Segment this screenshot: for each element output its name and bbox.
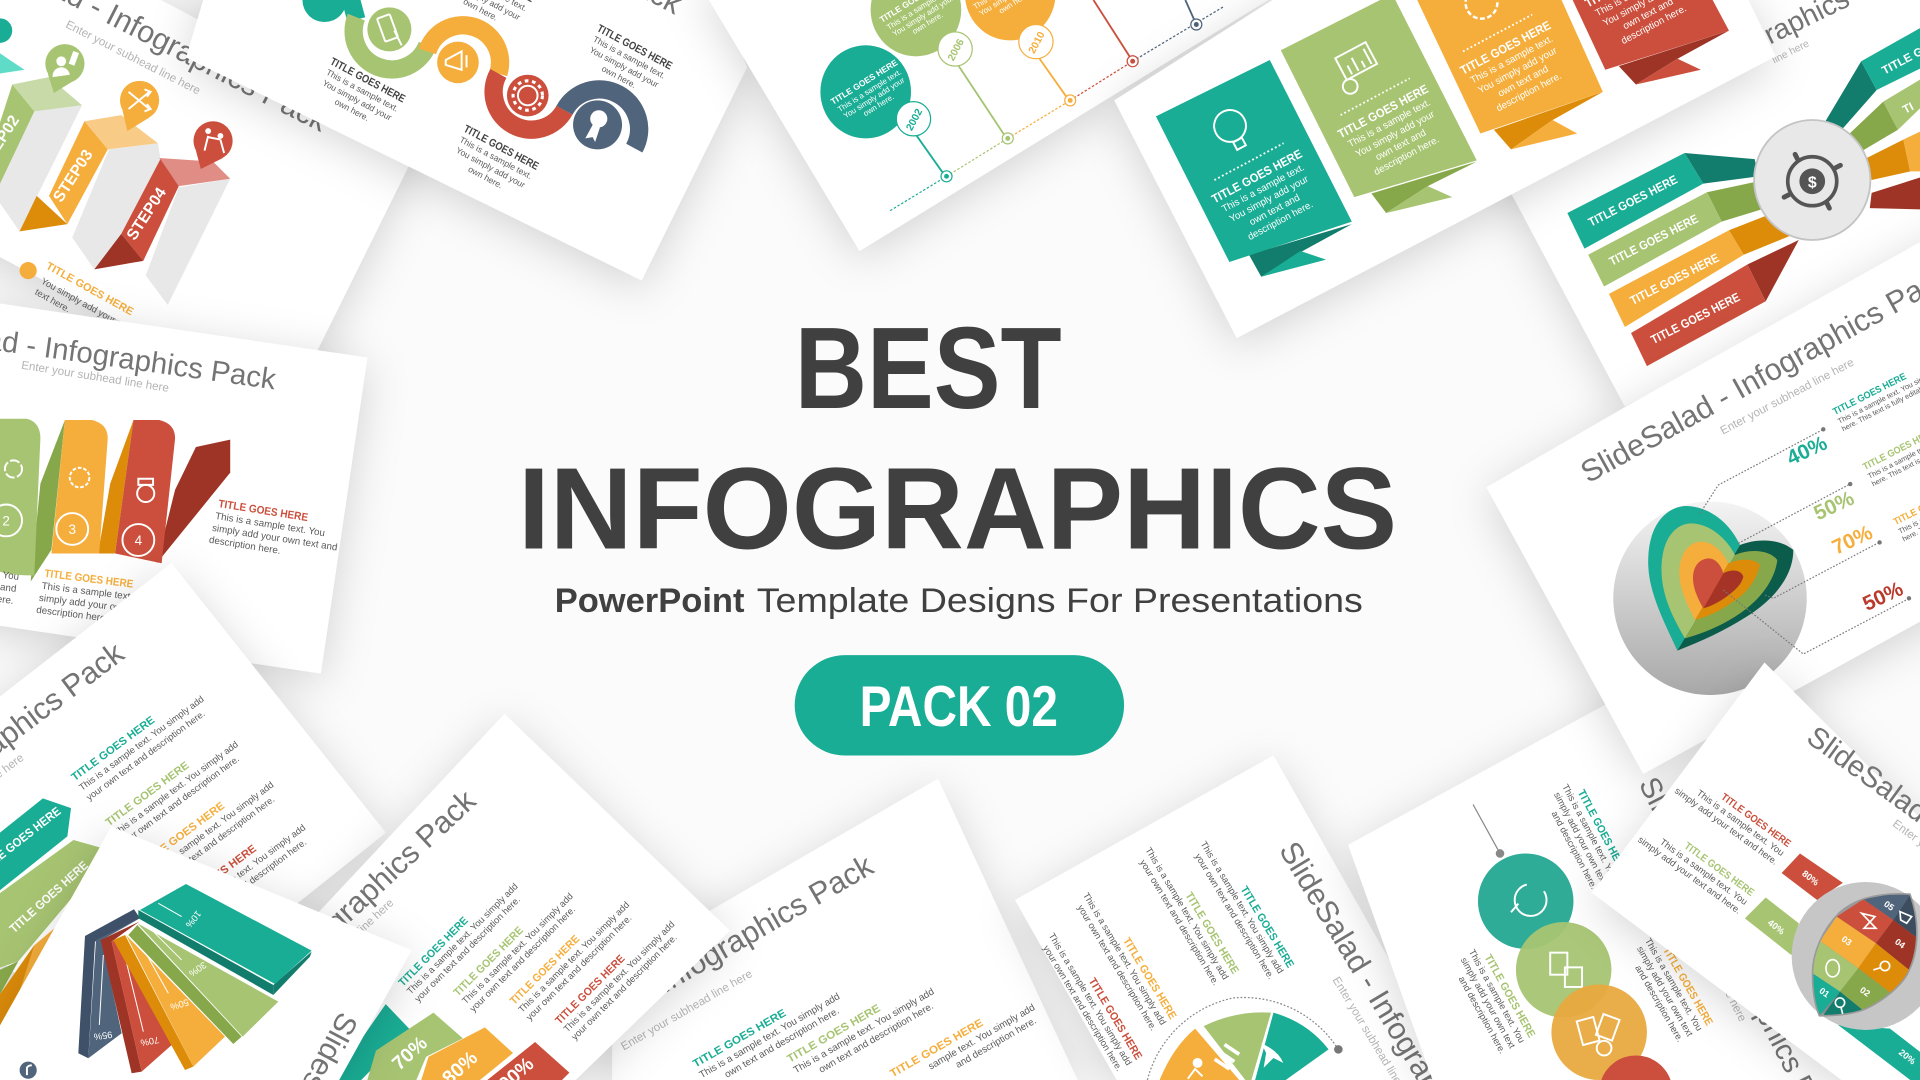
- text block: teal: TITLE GOES HERE: [69, 714, 157, 784]
- text block: teal: your own text and description here.: [1193, 852, 1276, 981]
- text block: teal: your own text and description here.: [85, 708, 207, 803]
- text block: red: your own text and description here.: [570, 933, 679, 1042]
- text block: red: TITLE GOES HERE: [1086, 976, 1144, 1062]
- slide subhead: line here: [1771, 38, 1811, 66]
- logo dot: [20, 1062, 37, 1079]
- milestone 2006: [871, 0, 1013, 144]
- percent arrow: orange 80%: [421, 1027, 513, 1080]
- text block: orange: [1624, 930, 1715, 1044]
- tab caption: green: [0, 543, 24, 607]
- percent labels: 50%: [1859, 577, 1907, 616]
- text block: green: This is a sample text. You simply add: [1143, 846, 1230, 981]
- milestone 2002: 2002: [905, 107, 925, 133]
- text block: red: simply add your text and here.: [1673, 785, 1780, 867]
- serpentine captions: own here.: [600, 64, 638, 90]
- bar: 40%: [1745, 898, 1799, 955]
- bar: 20%: 20%: [1897, 1047, 1917, 1066]
- tab caption: orange: TITLE GOES HERE: [44, 568, 134, 591]
- percent labels: 40%: [1783, 432, 1831, 470]
- text block: teal: TITLE GOES HERE: [396, 915, 471, 989]
- leader end dots: [1821, 427, 1911, 600]
- ribbon: green: TITLE GOES HERE: [1335, 82, 1431, 141]
- text block: teal: This is a sample text. You: [1560, 783, 1619, 880]
- badge: PACK 02: [795, 655, 1124, 756]
- milestone 2002: TITLE GOES HERE: [829, 57, 900, 107]
- funnel rays right: [1823, 28, 1920, 209]
- tab: green: [0, 419, 40, 576]
- serpentine captions: This is a sample text.: [325, 67, 400, 114]
- ribbon: orange: own text and: [1496, 64, 1550, 100]
- milestone 2010: 2010: [1027, 30, 1048, 56]
- percent arrow: green 70%: 70%: [388, 1032, 432, 1075]
- circle: red: [1601, 1055, 1671, 1080]
- text block: teal: This is a sample text. You simply add: [77, 694, 206, 793]
- bar: 80%: 80%: [1800, 868, 1821, 888]
- sphere labels: [1817, 899, 1907, 999]
- text block: teal: TITLE GOES HERE: [1238, 884, 1296, 970]
- serpentine captions: You simply add your: [454, 145, 527, 190]
- sphere labels: 03: [1840, 934, 1854, 948]
- panel: sphere pie slide: [1592, 662, 1920, 1080]
- funnel hub icon: [1754, 120, 1870, 240]
- heading: INFOGRAPHICS: INFOGRAPHICS: [518, 444, 1397, 574]
- heading: BEST: BEST: [795, 303, 1062, 433]
- funnel hub icon: $: [1808, 174, 1817, 191]
- funnel rays right: TI: [1901, 100, 1916, 117]
- text block: red: This is a sample text. You simply add: [562, 919, 677, 1034]
- text block: green: your own text and description here.: [1138, 858, 1221, 987]
- step 4 column: [94, 121, 233, 305]
- text block: teal: and description here.: [1550, 809, 1599, 891]
- sphere icons: [1826, 912, 1912, 1014]
- text block: orange: This is a sample text. You simply add: [1081, 891, 1168, 1027]
- tab caption: red: description here.: [208, 535, 281, 557]
- text block: teal: [1541, 777, 1629, 891]
- ribbon: teal: TITLE GOES HERE: [1209, 147, 1305, 206]
- text block: orange: your own text and description here.: [154, 794, 277, 888]
- sphere labels: 04: [1893, 937, 1907, 950]
- fan segment: red 70%: 70%: [140, 1035, 160, 1048]
- text block: red: your own text and description here.: [186, 837, 308, 931]
- milestone 2006: own here.: [911, 10, 945, 36]
- funnel bar: green: [1588, 181, 1769, 287]
- ribbon: orange: TITLE GOES HERE: [1458, 18, 1553, 78]
- serpentine captions: You simply add your: [321, 78, 394, 123]
- text block: green: TITLE GOES HERE: [104, 760, 191, 829]
- percent arrow: green 70%: [367, 1013, 463, 1080]
- text block: green: TITLE GOES HERE: [452, 925, 526, 999]
- milestone 2002: [820, 45, 952, 182]
- tab caption: red: This is a sample text. You: [214, 511, 326, 539]
- tab: orange: 3: [69, 522, 76, 537]
- milestone 2006: 2006: [946, 37, 967, 63]
- text block: green: TITLE GOES HERE: [1183, 890, 1241, 976]
- percent labels: 50%: [1810, 487, 1858, 525]
- slide subhead: Enter your subhead line here: [20, 359, 170, 395]
- funnel bar: orange: [1609, 213, 1795, 327]
- tab: red: [115, 420, 175, 563]
- text block: green: [1448, 942, 1537, 1056]
- 3D fan chart: [78, 884, 312, 1073]
- tab caption: orange: [36, 567, 154, 630]
- text block: red: TITLE GOES HERE: [1719, 792, 1793, 850]
- subtitle: PowerPoint: [555, 582, 744, 620]
- serpentine captions: own here.: [333, 97, 371, 123]
- bar: 80%: [1782, 853, 1843, 900]
- tab: red: 4: [135, 533, 143, 548]
- sphere labels: 02: [1858, 985, 1872, 999]
- text block: orange: This is a sample text. You: [1643, 936, 1704, 1033]
- ribbon: orange: You simply add your: [1476, 45, 1560, 96]
- text block: red: your own text and description here.: [1041, 944, 1124, 1073]
- funnel bar: red: TITLE GOES HERE: [1649, 290, 1742, 347]
- ribbon: teal: description here.: [1246, 199, 1315, 243]
- text block: orange: TITLE GOES HERE: [508, 933, 582, 1007]
- panel: overlapping circles slide: [1348, 662, 1842, 1080]
- tab: orange: [51, 420, 108, 553]
- funnel bar: orange: TITLE GOES HERE: [1628, 251, 1721, 308]
- arrow: orange: [0, 912, 73, 1035]
- sphere segments: [1813, 894, 1916, 1015]
- serpentine captions: This is a sample text.: [591, 34, 667, 81]
- fan segment: teal 10%: [138, 884, 312, 995]
- ribbon: teal: You simply add your: [1228, 174, 1311, 225]
- milestone 2010: [965, 0, 1076, 106]
- dotted leaders: [1700, 429, 1909, 654]
- tab caption: orange: description here.: [36, 605, 109, 625]
- funnel bar: red: [1631, 240, 1799, 366]
- text block: orange: simply add your own text: [1635, 945, 1695, 1039]
- slide subhead: Enter your subhead line here: [1670, 885, 1749, 1024]
- circle: green: [1516, 922, 1611, 1018]
- ribbon: red: description here.: [1620, 3, 1689, 47]
- arrow: green: TITLE GOES HERE: [7, 858, 91, 936]
- text block: teal: TITLE GOES HERE: [1575, 788, 1629, 876]
- fan segment: orange 50%: [113, 935, 225, 1070]
- tab caption: red: [208, 497, 342, 566]
- text block: orange: [1892, 470, 1920, 543]
- panel: arrows slide: [0, 563, 386, 1053]
- ribbon: orange: This is a sample text.: [1469, 34, 1555, 86]
- fan segment: orange 50%: 50%: [169, 997, 190, 1012]
- milestone 2002: You simply add your: [842, 75, 907, 120]
- percent arrow: teal: [333, 1004, 410, 1080]
- slide subhead: Enter your subhead line here: [1718, 356, 1856, 437]
- panel: pie slide: [1015, 756, 1457, 1080]
- text block: green: and description here.: [1457, 975, 1507, 1055]
- text block: orange: your own text and description here.: [524, 913, 634, 1022]
- leader line: [1473, 804, 1504, 858]
- timeline axis: [890, 6, 1224, 211]
- text block: green: This is a sample text. You: [1467, 948, 1527, 1045]
- panel: steps slide: [0, 0, 422, 410]
- slide title: SlideSalad - Infographics Pack: [501, 848, 880, 1080]
- ribbon: red: [1570, 0, 1729, 84]
- text block: green: This is a sample text. You simply add: [112, 739, 240, 838]
- text block: teal: your own text and description here.: [413, 895, 522, 1004]
- subtitle remainder: Template Designs For Presentations: [757, 582, 1363, 620]
- funnel bar: green: TITLE GOES HERE: [1607, 212, 1701, 269]
- text block: green: TITLE GOES HERE: [785, 1002, 882, 1065]
- text block: orange: TITLE GOES HERE: [1120, 936, 1178, 1022]
- panel: folded tabs slide: [0, 300, 367, 673]
- text block: green: This is a sample text. You simply add: [792, 986, 936, 1076]
- serpentine captions: TITLE GOES HERE: [595, 23, 674, 72]
- text block: red: This is a sample text. You simply add: [179, 823, 307, 921]
- tab caption: orange: This is a sample text. You: [41, 581, 152, 605]
- funnel bar: teal: [1567, 153, 1758, 249]
- sphere labels: 05: [1882, 899, 1896, 913]
- panel: heart slide: [1487, 220, 1920, 774]
- step caption: TITLE GOES HERE: [44, 260, 135, 318]
- serpentine captions: You simply add your: [588, 45, 660, 90]
- serpentine captions: This is a sample text.: [458, 134, 534, 181]
- tab: green: 2: [2, 513, 10, 528]
- fan segment: green 30%: [128, 923, 278, 1044]
- text block: green: This is a sample text. You: [1658, 837, 1749, 907]
- gray sphere: [1613, 502, 1807, 695]
- tab wedges: [31, 420, 230, 582]
- text block: green: This is a sample text. You simply add: [460, 891, 575, 1006]
- serpentine path: [348, 0, 639, 148]
- circle: orange: [1551, 984, 1647, 1080]
- fan segment: slate 95%: [78, 909, 140, 1058]
- percent labels: 70%: [1829, 521, 1876, 559]
- text block: teal: own text and description here.: [723, 1006, 841, 1080]
- step 4 column: STEP04: [124, 185, 170, 243]
- step 3 column: [20, 81, 160, 269]
- ribbon: orange: [1414, 0, 1603, 149]
- text block: red: This is a sample text. You simply add: [1047, 931, 1134, 1067]
- ribbon: green: own text and: [1374, 127, 1428, 163]
- text block: green: your own text and description here.: [119, 754, 241, 848]
- serpentine captions: TITLE GOES HERE: [461, 123, 541, 173]
- pie chart: [1147, 997, 1343, 1080]
- text block: orange: and description here.: [954, 1016, 1039, 1071]
- milestone slate: [1185, 0, 1202, 30]
- text block: green: TITLE GOES HERE: [1482, 953, 1537, 1040]
- subtitle: [555, 582, 1363, 620]
- ribbon: green: You simply add your: [1354, 109, 1437, 160]
- milestone red: [1093, 0, 1138, 67]
- text block: green: your own text and description here.: [468, 904, 577, 1014]
- text block: orange: [888, 991, 1043, 1080]
- text block: orange: TITLE GOES HERE: [139, 800, 227, 869]
- text block: orange: your own text and description here.: [1075, 903, 1159, 1032]
- ribbon: teal: [1156, 60, 1352, 277]
- ribbon: orange: description here.: [1495, 71, 1564, 114]
- step caption: text here.: [33, 287, 72, 314]
- serpentine captions: own here.: [467, 164, 504, 190]
- step 3 column: STEP03: [50, 147, 97, 205]
- bar: 40%: 40%: [1766, 917, 1786, 937]
- text block: red: TITLE GOES HERE: [171, 843, 259, 912]
- circle: teal: [1478, 853, 1573, 949]
- serpentine captions: TITLE GOES HERE: [328, 56, 407, 105]
- slide subhead: Enter your subhead line here: [619, 967, 755, 1053]
- milestone 2002: own here.: [862, 92, 896, 118]
- panel: timeline slide: [698, 0, 1298, 251]
- tab caption: orange: simply add your own text: [38, 593, 147, 617]
- segmented sphere: [1792, 882, 1920, 1030]
- text block: teal: TITLE GOES HERE: [1831, 371, 1909, 418]
- serpentine icons: [302, 0, 622, 149]
- fan segment: teal 10%: 10%: [184, 909, 203, 930]
- ribbon: teal: own text and: [1248, 192, 1302, 228]
- panel: percent columns slide: [154, 714, 730, 1080]
- text block: red: This is a sample text. You: [1695, 788, 1786, 858]
- text block: orange: TITLE GOES HERE: [1660, 945, 1715, 1028]
- fan segment: red 70%: [101, 922, 172, 1073]
- ribbon: green: This is a sample text.: [1346, 97, 1433, 150]
- text block: green: TITLE GOES HERE: [1682, 841, 1756, 899]
- serpentine captions: [313, 0, 674, 201]
- step 1 fragment: [0, 18, 24, 73]
- text block: teal: This is a sample text. You simply add: [698, 991, 842, 1080]
- ribbon: green: [1281, 0, 1477, 213]
- fan segment: green 30%: 30%: [187, 960, 208, 978]
- fan segment: slate 95%: 95%: [93, 1029, 113, 1042]
- percent arrow: red 90%: [487, 1042, 569, 1080]
- text block: orange: sample text. You simply add: [927, 1002, 1037, 1072]
- panel: funnel slide: [1439, 0, 1920, 407]
- tab caption: red: TITLE GOES HERE: [217, 498, 309, 524]
- tab caption: red: simply add your own text and: [211, 523, 338, 554]
- step 2 column: [0, 44, 84, 231]
- panel: 3D fan slide: [0, 827, 411, 1080]
- text block: orange: This is a sample text. You simply add: [147, 780, 276, 878]
- panel: serpentine process slide: [186, 0, 747, 280]
- funnel bar: teal: TITLE GOES HERE: [1586, 172, 1680, 229]
- text block: teal: simply add your own text: [1552, 791, 1609, 886]
- slide subhead: Enter your subhead line here: [64, 18, 202, 97]
- text block: orange: and description here.: [1633, 963, 1685, 1044]
- text block: green: simply add your text and here.: [1636, 834, 1743, 916]
- text block: green: own text and description here.: [817, 1001, 936, 1076]
- percent labels: [1783, 432, 1907, 616]
- slide subhead: Enter your subhead line here: [278, 896, 396, 1008]
- arrow: green: [0, 840, 104, 970]
- text block: green: [1861, 415, 1920, 488]
- milestone 2002: This is a sample text.: [836, 67, 903, 114]
- text block: orange: TITLE GOES HERE: [888, 1017, 985, 1080]
- badge: PACK 02: PACK 02: [860, 675, 1058, 739]
- step caption: You simply add your own: [39, 276, 134, 335]
- text block: red: TITLE GOES HERE: [553, 953, 628, 1027]
- step caption: [20, 260, 135, 335]
- text block: teal: This is a sample text. You simply add: [1198, 839, 1286, 975]
- text block: teal: TITLE GOES HERE: [691, 1007, 788, 1070]
- text block: orange: This is a sample text. You simply add: [516, 900, 631, 1015]
- sphere labels: 01: [1817, 986, 1831, 999]
- panel: ribbons slide: [1114, 0, 1776, 338]
- text block: teal: This is a sample text. You simply add: [405, 881, 520, 996]
- ribbon: teal: This is a sample text.: [1220, 162, 1306, 215]
- ribbon: green: description here.: [1372, 134, 1441, 178]
- layered heart: [1648, 429, 1909, 654]
- panel: percent arrows slide: [501, 779, 1078, 1080]
- text block: green: simply add your own text: [1459, 956, 1517, 1050]
- bar: 20%: [1838, 1025, 1920, 1080]
